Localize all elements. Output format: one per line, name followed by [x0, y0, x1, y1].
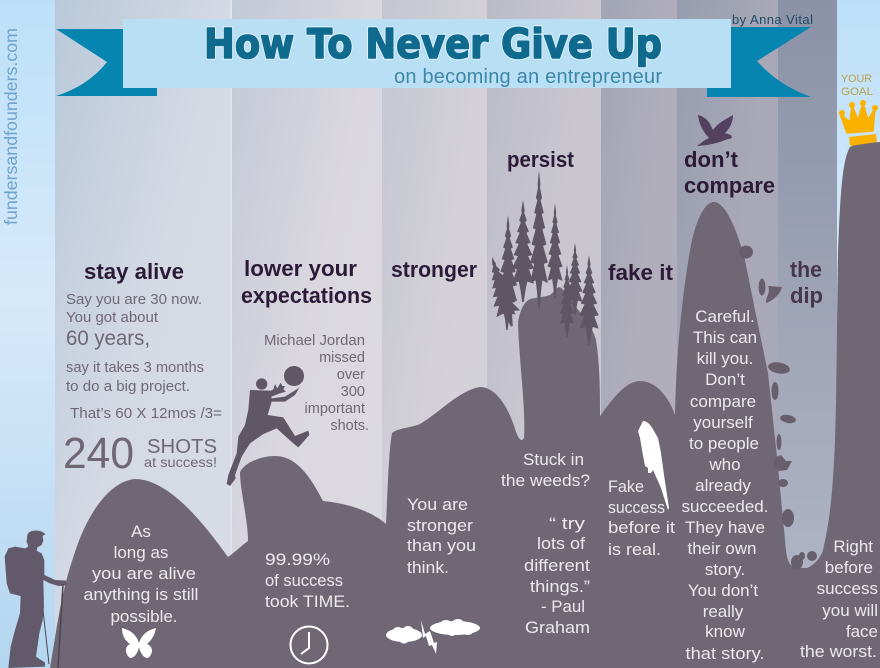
heading: stronger: stronger — [391, 257, 477, 282]
text: 99.99%: 99.99% — [265, 550, 330, 569]
text: careful: compare — [690, 392, 756, 411]
text: stuck in the weeds: things.” — [530, 577, 590, 596]
text: projects calculation: You got about — [66, 310, 158, 326]
text: you are stronger: stronger — [407, 516, 473, 535]
text: fake success: success — [608, 498, 665, 517]
text: stuck in the weeds: - Paul — [541, 597, 585, 616]
title: How To Never Give Up — [204, 20, 662, 68]
your goal label: YOUR — [841, 73, 872, 85]
text: Michael Jordan: important — [305, 401, 365, 417]
text: 99.99%: of success — [265, 571, 343, 590]
text: careful: They have — [685, 518, 765, 537]
title banner — [123, 19, 731, 88]
text: right before success — [800, 537, 878, 661]
heading: lower your expectations: expectations — [241, 283, 372, 308]
hiker — [5, 531, 67, 668]
text: careful: kill you. — [697, 349, 753, 368]
text: right before success: the worst. — [800, 642, 877, 661]
heading: stay alive: stay alive — [84, 259, 184, 284]
text: 99.99%: took TIME. — [265, 592, 350, 611]
text: careful: know — [705, 622, 746, 641]
trees — [480, 170, 599, 345]
basketball player — [227, 366, 309, 486]
icon: bird — [697, 115, 733, 146]
heading: the dip — [790, 257, 823, 308]
text: careful: that story. — [686, 644, 764, 663]
icon: butterfly — [122, 628, 156, 658]
text: as long as you are alive: As — [131, 522, 151, 541]
text: careful: to people — [689, 434, 759, 453]
mountain range silhouette — [50, 142, 880, 668]
text: careful: You don’t — [688, 581, 758, 600]
text: stuck in the weeds: different — [524, 556, 590, 575]
site credit: fundersandfounders.com — [1, 28, 21, 225]
text: stuck in the weeds: Graham — [525, 618, 590, 637]
text: careful: their own — [688, 539, 756, 558]
text: as long as you are alive: anything is still — [84, 585, 198, 604]
text: fake success: is real. — [608, 540, 661, 559]
text: Michael Jordan: missed — [319, 350, 365, 366]
text: projects calculation: 60 years, — [66, 327, 150, 350]
subtitle: on becoming an entrepreneur — [394, 66, 662, 88]
heading: fake it: fake it — [608, 260, 674, 285]
text: projects calculation: That’s 60 X 12mos /3= — [70, 406, 222, 422]
text: as long as you are alive: you are alive — [92, 564, 196, 583]
text: fake success — [608, 477, 675, 559]
heading: persist: persist — [507, 147, 575, 172]
text: careful: yourself — [693, 413, 753, 432]
text: right before success: before — [825, 558, 873, 577]
text: fake success: Fake — [608, 477, 644, 496]
heading: don't compare: compare — [684, 173, 775, 198]
text: as long as you are alive — [84, 522, 198, 626]
text: Michael Jordan — [264, 333, 369, 434]
text: right before success: Right — [833, 537, 873, 556]
icon: clock — [290, 626, 328, 664]
heading: the dip: dip — [790, 283, 823, 308]
text: careful: succeeded. — [682, 497, 768, 516]
text: careful — [682, 307, 768, 663]
text: careful: really — [703, 602, 744, 621]
author: by Anna Vital — [732, 12, 813, 27]
text: projects calculation: say it takes 3 months — [66, 360, 204, 376]
text: stuck in the weeds: lots of — [537, 534, 585, 553]
icon: parrot — [638, 421, 669, 510]
text: projects calculation: Say you are 30 now. — [66, 292, 202, 308]
text: stuck in the weeds — [501, 450, 590, 637]
text: Michael Jordan: over — [337, 367, 365, 383]
heading: don't compare — [684, 147, 775, 198]
text: careful: This can — [693, 328, 757, 347]
text: careful: Careful. — [695, 307, 755, 326]
title: How To Never Give Up — [204, 20, 662, 68]
text: as long as you are alive: possible. — [110, 607, 178, 626]
240 shots: 240 — [63, 429, 134, 478]
text: projects calculation — [66, 292, 222, 422]
heading: don't compare: don’t — [684, 147, 739, 172]
text: careful: Don’t — [705, 370, 745, 389]
text: you are stronger: You are — [407, 495, 468, 514]
text: Michael Jordan: Michael Jordan — [264, 333, 365, 349]
text: projects calculation: to do a big project. — [66, 379, 190, 395]
text: careful: who — [708, 455, 741, 474]
ribbon left — [56, 29, 157, 96]
text: stuck in the weeds: Stuck in — [523, 450, 584, 469]
text: as long as you are alive: long as — [114, 543, 168, 562]
text: you are stronger: than you — [407, 536, 476, 555]
ribbon right — [707, 27, 811, 97]
your goal label — [841, 73, 873, 98]
text: stuck in the weeds: the weeds? — [501, 471, 590, 490]
heading: lower your expectations — [241, 256, 372, 308]
240 shots: SHOTS — [147, 436, 217, 458]
your goal label: GOAL — [841, 86, 873, 98]
240 shots — [63, 429, 217, 478]
hiking poles — [43, 584, 63, 668]
text: stuck in the weeds: “ try — [549, 514, 586, 533]
text: right before success: you will — [822, 601, 878, 620]
heading: lower your expectations: lower your — [244, 256, 357, 281]
text: careful: already — [695, 476, 751, 495]
text: you are stronger — [407, 495, 476, 577]
text: careful: story. — [705, 560, 745, 579]
icon: crown — [839, 100, 878, 146]
text: Michael Jordan: 300 — [341, 384, 365, 400]
text: Michael Jordan: shots. — [330, 418, 369, 434]
text: fake success: before it — [608, 518, 675, 537]
text: you are stronger: think. — [407, 558, 449, 577]
text: right before success: success — [817, 579, 878, 598]
240 shots: at success! — [144, 454, 217, 470]
text: 99.99% — [265, 550, 350, 611]
icon: clouds and lightning — [386, 619, 480, 654]
heading: the dip: the — [790, 257, 822, 282]
text: right before success: face — [846, 622, 878, 641]
stones — [739, 246, 817, 569]
